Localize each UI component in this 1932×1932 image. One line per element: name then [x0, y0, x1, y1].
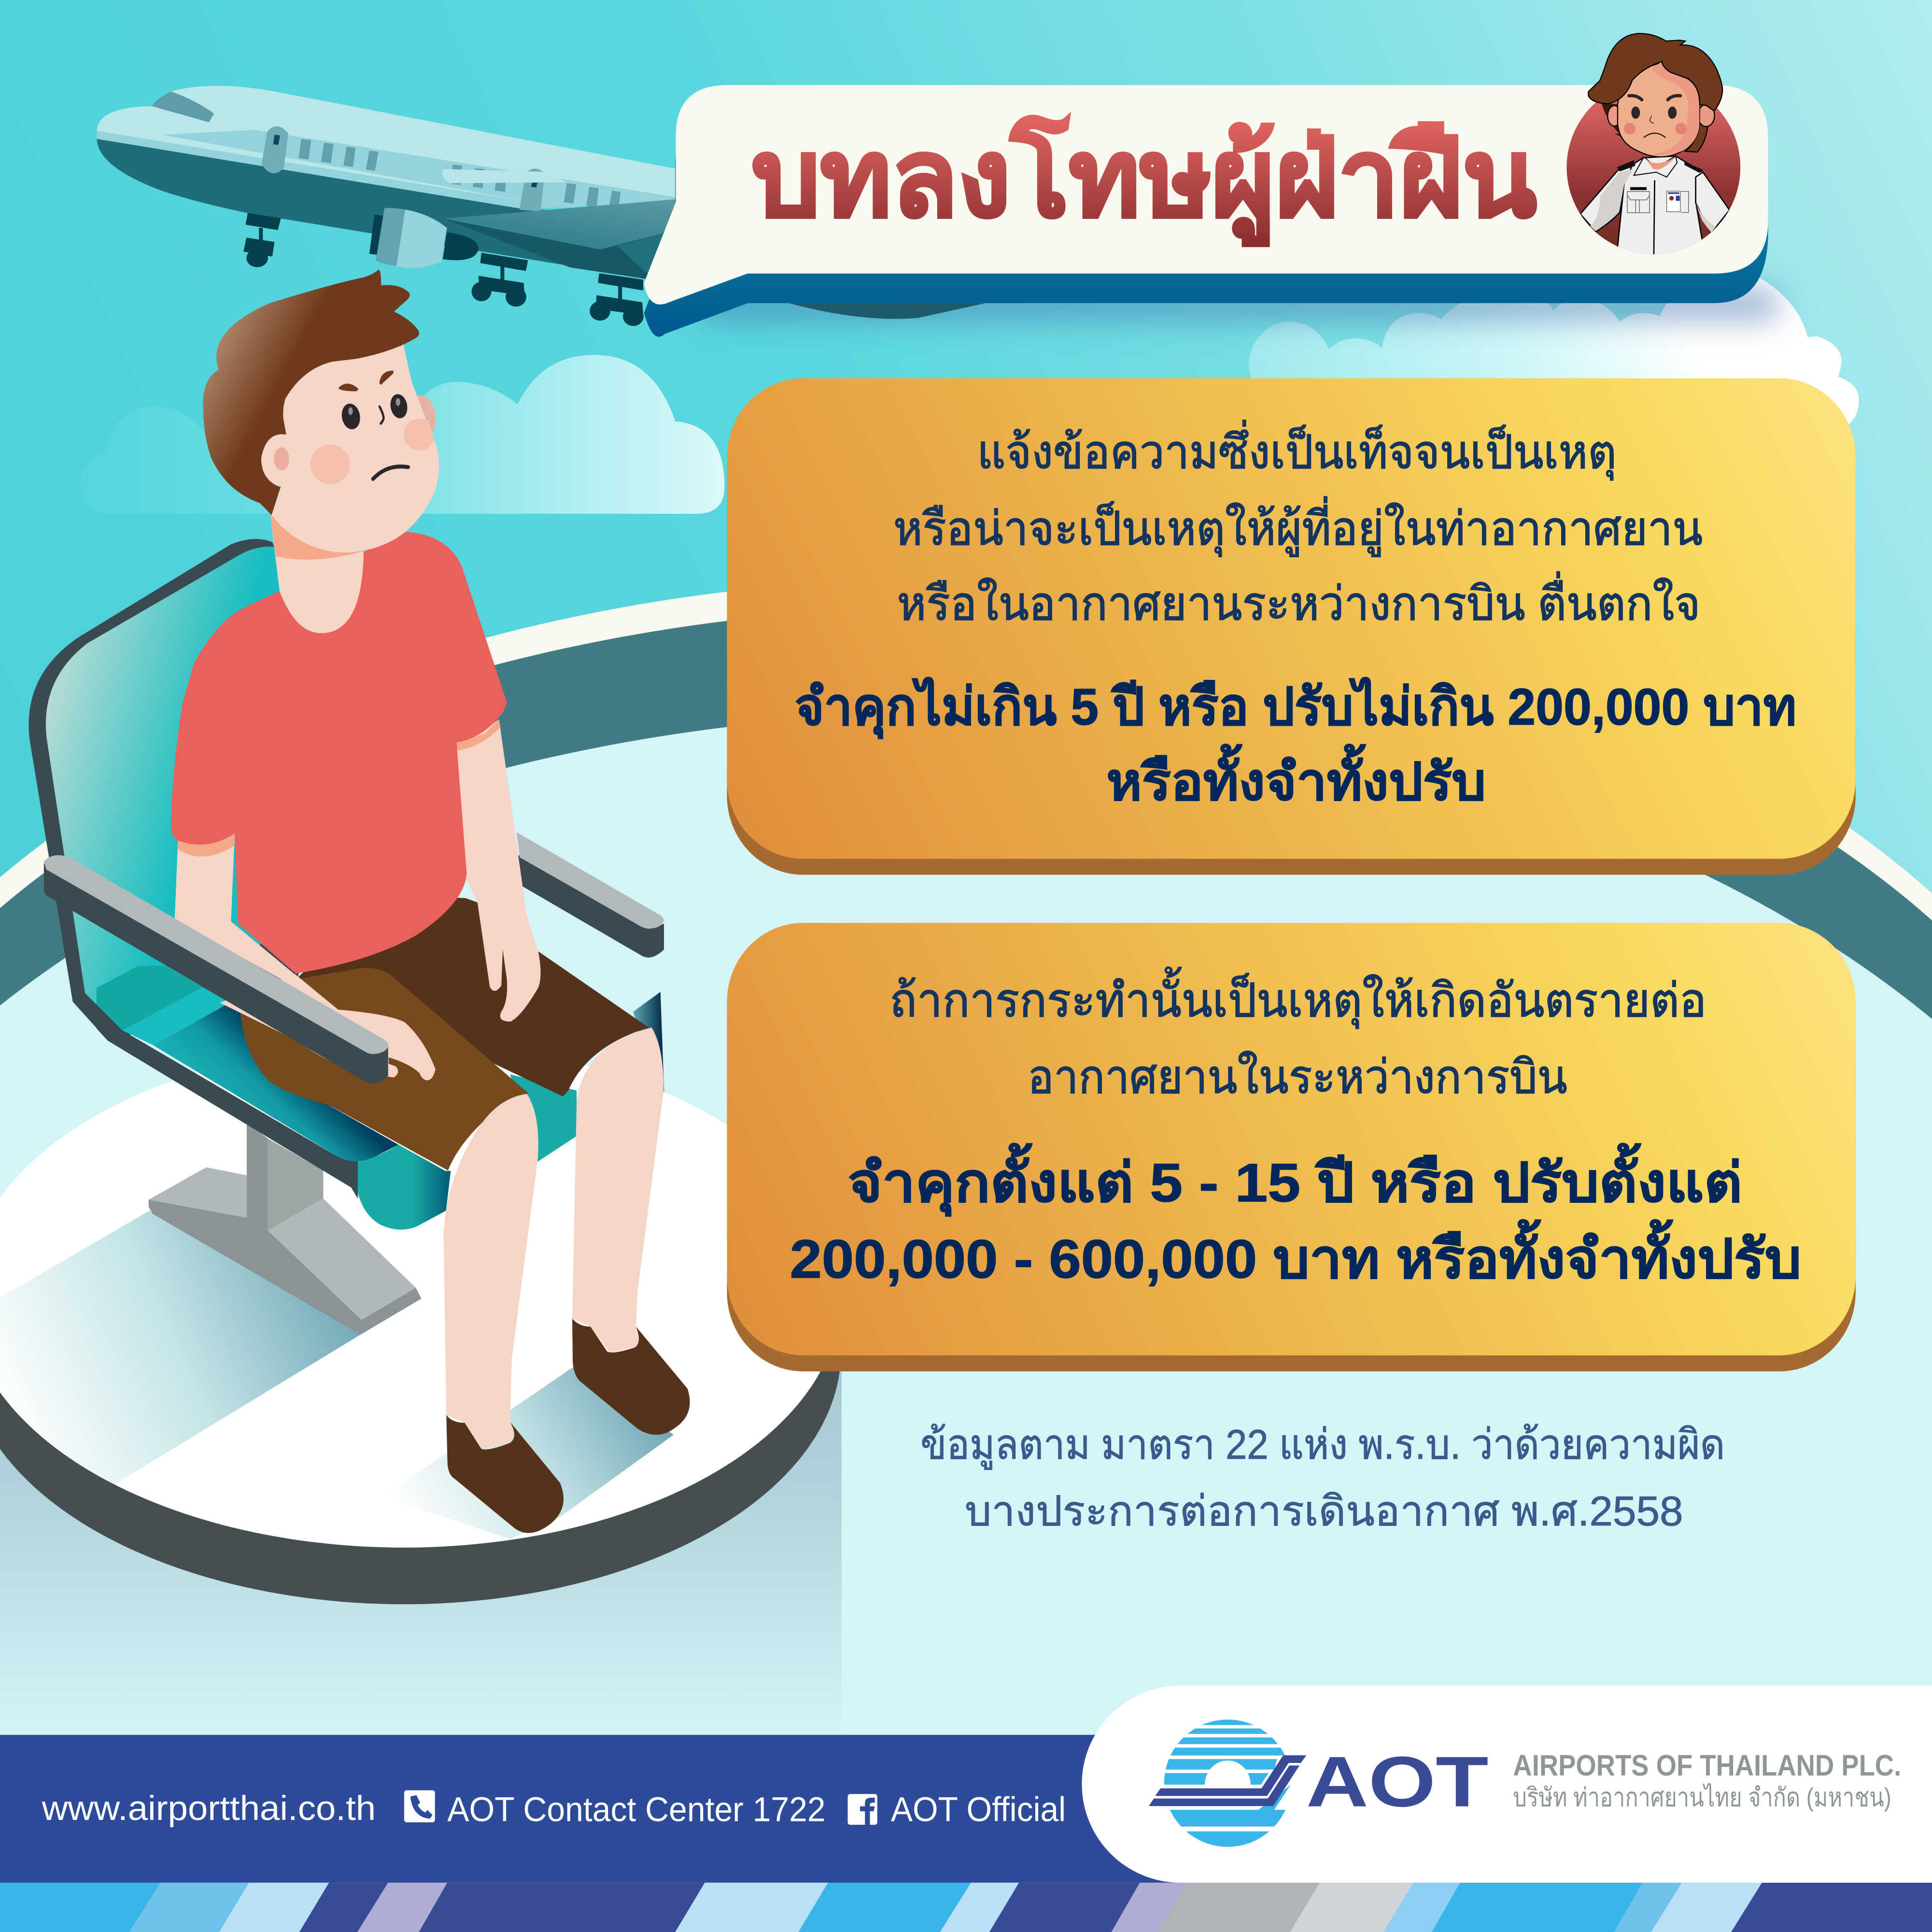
near hand — [220, 974, 436, 1080]
bubble shadow — [702, 288, 1777, 320]
neck shadow — [270, 515, 369, 560]
near shorts — [240, 968, 529, 1170]
avatar shirt details — [1654, 180, 1655, 254]
panel one — [727, 378, 1856, 875]
seat right side — [510, 1074, 577, 1162]
avatar nose and mouth — [1650, 116, 1654, 123]
panel two — [727, 923, 1856, 1371]
legal source note: ข้อมูลตาม มาตรา 22 แห่ง พ.ร.บ. ว่าด้วยความผิด — [920, 1421, 1725, 1470]
contact center: AOT Contact Center 1722 — [447, 1790, 826, 1829]
avatar cheeks — [1624, 123, 1636, 135]
avatar right arm — [1696, 172, 1730, 233]
panel one penalty — [795, 677, 1796, 811]
seat and feet shadows — [0, 1211, 674, 1539]
avatar eyes — [1631, 107, 1640, 119]
seat shade — [97, 966, 202, 1030]
t-shirt — [171, 532, 507, 973]
plane upper fuselage — [97, 86, 686, 208]
avatar shirt body — [1617, 156, 1703, 257]
eyes — [339, 401, 363, 432]
icon: phone — [404, 1791, 435, 1822]
ear inner — [274, 448, 289, 470]
seat gradient — [153, 1003, 398, 1161]
cheeks — [310, 445, 350, 484]
platform rim — [0, 1099, 841, 1604]
airport ring: cream band — [0, 578, 1932, 1109]
seat — [97, 966, 451, 1229]
panel one description: หรือในอากาศยานระหว่างการบิน ตื่นตกใจ — [897, 571, 1700, 630]
cloud left — [80, 355, 724, 514]
AOT logo mark — [1148, 1720, 1306, 1847]
airplane — [97, 86, 686, 326]
far shorts — [296, 894, 649, 1097]
speech bubble depth — [644, 86, 1768, 337]
panel two penalty: จำคุกตั้งแต่ 5 - 15 ปี หรือ ปรับตั้งแต่ — [848, 1143, 1742, 1217]
avatar figure — [1580, 156, 1730, 257]
panel two penalty: 200,000 - 600,000 บาท หรือทั้งจำทั้งปรับ — [790, 1219, 1802, 1289]
panel two description: ถ้าการกระทำนั้นเป็นเหตุให้เกิดอันตรายต่อ — [889, 967, 1706, 1029]
panel two description: อากาศยานในระหว่างการบิน — [1028, 1050, 1567, 1103]
hair — [203, 269, 419, 515]
near leg — [444, 1094, 538, 1449]
avatar hair back — [1602, 103, 1621, 137]
avatar face — [1618, 62, 1700, 157]
panel one penalty: หรือทั้งจำทั้งปรับ — [1106, 744, 1486, 811]
neck — [270, 515, 364, 633]
man body — [171, 515, 541, 1022]
panel one depth — [727, 395, 1856, 875]
far cheek — [404, 395, 436, 442]
website: www.airportthai.co.th — [42, 1789, 376, 1828]
near shoe — [446, 1415, 564, 1533]
near armrest side — [44, 863, 388, 1084]
pedestal — [149, 1122, 422, 1335]
avatar eyebrows — [1629, 96, 1642, 100]
plane middle gear — [472, 253, 528, 307]
far sleeve cuff — [456, 719, 500, 750]
icon: facebook — [848, 1794, 877, 1825]
seat frame — [97, 1004, 373, 1199]
face — [271, 336, 439, 552]
legal source note — [920, 1421, 1725, 1535]
nose — [380, 407, 383, 423]
plane cockpit window — [152, 91, 214, 122]
plane near wing — [444, 198, 686, 285]
chair back shell — [46, 547, 369, 1030]
seat far edge — [634, 992, 664, 1092]
cloud right — [1249, 277, 1859, 438]
plane window band — [162, 130, 686, 208]
panel one description: แจ้งข้อความซึ่งเป็นเท็จจนเป็นเหตุ — [977, 420, 1617, 481]
far shoe — [572, 1319, 690, 1435]
AOT wordmark: AOT — [1306, 1742, 1488, 1822]
near sleeve cuff — [178, 833, 235, 857]
plane rear door and windows — [298, 139, 621, 210]
footer bar — [0, 1735, 1183, 1883]
near armrest — [44, 855, 388, 1084]
plane belly below bubble — [789, 303, 986, 319]
plane engine — [369, 208, 479, 268]
seat light teal — [123, 987, 230, 1045]
eyebrows — [338, 384, 358, 391]
panel two penalty — [790, 1143, 1802, 1289]
avatar — [1566, 33, 1740, 257]
near armrest top — [44, 855, 388, 1054]
panel two depth — [727, 939, 1856, 1371]
footer stripes — [0, 1883, 1932, 1932]
man head — [203, 269, 439, 552]
facebook name: AOT Official — [891, 1790, 1066, 1829]
legal source note: บางประการต่อการเดินอากาศ พ.ศ.2558 — [965, 1488, 1683, 1535]
floor — [0, 713, 1932, 1932]
panel one description: หรือน่าจะเป็นเหตุให้ผู้ที่อยู่ในท่าอากาศยาน — [893, 496, 1703, 557]
avatar hair — [1588, 33, 1722, 111]
plane front gear — [243, 213, 281, 267]
panel one description — [893, 420, 1703, 630]
speech bubble — [644, 85, 1768, 304]
platform top — [0, 1043, 841, 1548]
avatar left arm — [1580, 166, 1632, 232]
near arm — [175, 833, 338, 1010]
logo panel — [1082, 1686, 1932, 1883]
panel two description — [889, 967, 1706, 1103]
far leg — [572, 1028, 663, 1353]
mouth — [373, 466, 408, 479]
avatar ears — [1608, 106, 1621, 126]
seat cushion — [358, 1144, 451, 1229]
airport ring: teal band — [0, 607, 1932, 1109]
chair back frame — [28, 539, 357, 1041]
panel two face — [727, 923, 1856, 1355]
avatar disc — [1566, 81, 1740, 254]
far armrest — [462, 832, 664, 958]
panel one penalty: จำคุกไม่เกิน 5 ปี หรือ ปรับไม่เกิน 200,000 บาท — [795, 677, 1796, 739]
under-platform shade — [0, 1355, 842, 1737]
ear — [261, 433, 299, 486]
platform — [0, 1043, 841, 1604]
panel one face — [727, 378, 1856, 859]
plane stripe — [97, 131, 561, 209]
seated man and seat — [28, 269, 690, 1533]
plane lower fuselage — [97, 139, 686, 285]
plane rear gear — [590, 273, 644, 326]
plane far wing — [442, 169, 568, 183]
title: บทลงโทษผู้ฝ่าฝืน — [752, 115, 1537, 246]
plane doors — [262, 127, 545, 212]
far arm — [456, 719, 541, 1022]
